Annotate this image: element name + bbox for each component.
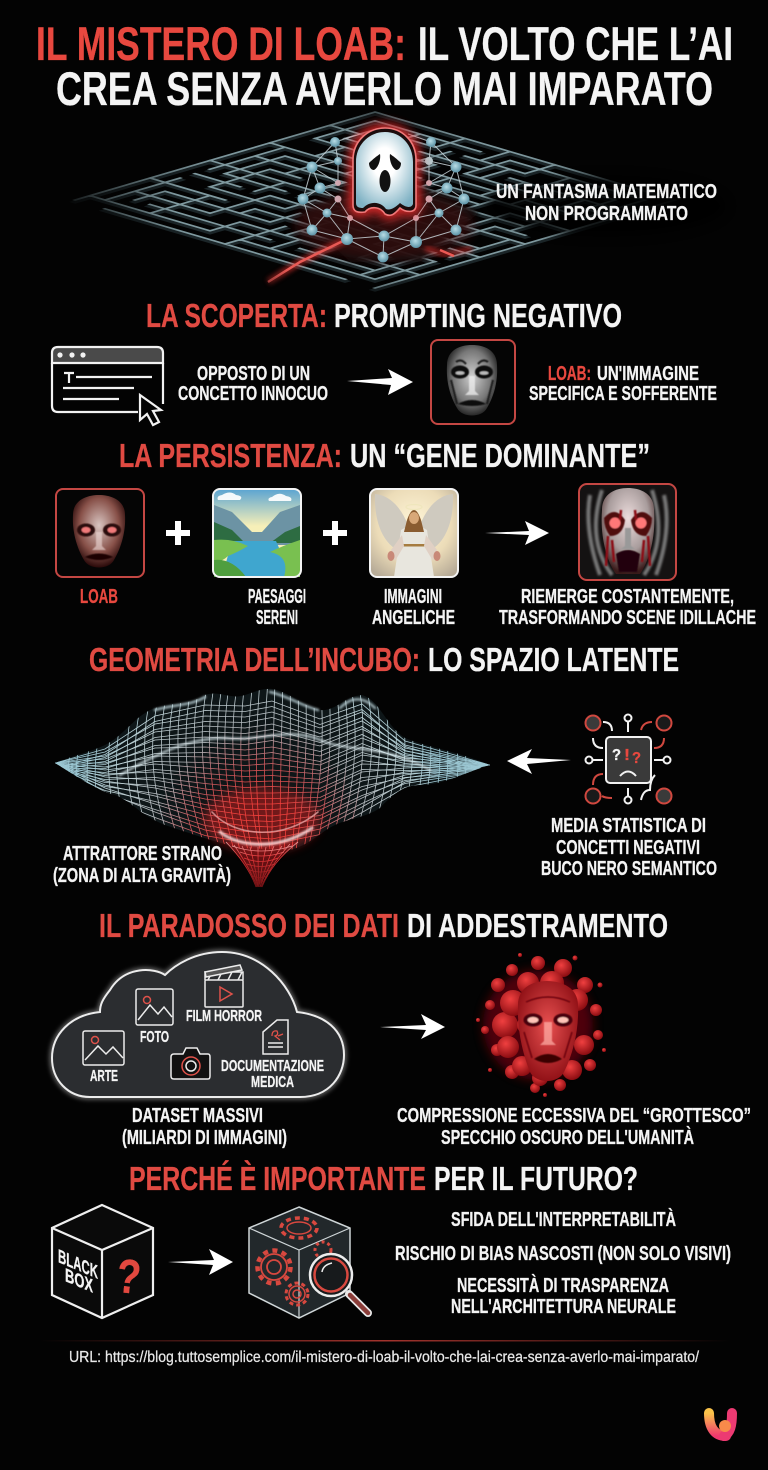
label: serene landscapes: SERENI <box>256 607 298 629</box>
icon: art <box>83 1031 124 1065</box>
icon: confused processor: ! <box>624 747 630 764</box>
heading: geometria dell'incubo: GEOMETRIA DELL’INCUBO: <box>89 641 420 678</box>
heading: la persistenza: UN “GENE DOMINANTE” <box>350 437 650 474</box>
caption: massive datasets: (MILIARDI DI IMMAGINI) <box>122 1127 287 1149</box>
label: Loab: LOAB <box>80 586 118 608</box>
icon: confused processor: ? <box>612 747 621 764</box>
image: Loab face red eyes <box>56 489 144 577</box>
caption: mathematical ghost: NON PROGRAMMATO <box>525 203 688 225</box>
label: serene landscapes: PAESAGGI <box>248 586 306 608</box>
title: IL MISTERO DI LOAB: <box>36 17 406 70</box>
icon: transparent cube with gears and magnifier <box>249 1207 368 1318</box>
icon: black box cube: BOX <box>65 1265 94 1298</box>
caption: statistical mean: MEDIA STATISTICA DI <box>551 815 706 837</box>
caption: mathematical ghost <box>496 181 717 225</box>
image: serene landscape <box>213 489 301 577</box>
importance list: NECESSITÀ DI TRASPARENZA <box>457 1274 669 1297</box>
caption: strange attractor <box>53 843 231 887</box>
caption: statistical mean <box>541 815 717 880</box>
cloud labels: ARTE <box>90 1068 118 1085</box>
cloud labels <box>90 1008 324 1091</box>
label: angelic images <box>372 586 455 629</box>
caption: massive datasets <box>122 1105 287 1149</box>
image: monstrous Loab <box>579 484 676 580</box>
prompt caption: OPPOSTO DI UN <box>197 363 310 385</box>
importance list <box>395 1208 731 1318</box>
arrow <box>380 1014 445 1039</box>
heading: il paradosso: DI ADDESTRAMENTO <box>407 907 668 944</box>
importance list: NELL'ARCHITETTURA NEURALE <box>451 1296 676 1318</box>
prompt caption <box>178 363 328 405</box>
heading: la persistenza <box>119 437 650 474</box>
label: angelic images: ANGELICHE <box>372 607 455 629</box>
arrow <box>347 369 413 395</box>
panel: training data paradox <box>52 952 751 1149</box>
icon: clapperboard <box>205 965 243 1007</box>
icon: logo <box>709 1413 732 1436</box>
caption: statistical mean: CONCETTI NEGATIVI <box>556 837 700 859</box>
heading: la scoperta: PROMPTING NEGATIVO <box>334 297 622 334</box>
panel: latent space <box>53 680 717 887</box>
plus sign <box>323 521 347 545</box>
icon: confused processor: ? <box>632 750 641 767</box>
heading: il paradosso <box>99 907 668 944</box>
icon: browser with cursor <box>52 347 163 425</box>
image: grotesque red face <box>476 953 606 1097</box>
label: serene landscapes <box>248 586 306 629</box>
label: angelic images: IMMAGINI <box>384 586 442 608</box>
heading: geometria dell'incubo: LO SPAZIO LATENTE <box>428 641 679 678</box>
cloud labels: DOCUMENTAZIONE <box>221 1058 324 1075</box>
panel: negative prompting <box>52 340 717 425</box>
arrow <box>485 521 549 545</box>
Loab description <box>529 363 717 405</box>
Loab description: UN'IMMAGINE <box>597 363 699 385</box>
icon: black box cube <box>52 1205 153 1318</box>
heading: perché è importante: PER IL FUTURO? <box>434 1160 638 1197</box>
icon: medical document <box>263 1020 288 1054</box>
cloud of datasets <box>52 952 344 1097</box>
caption: strange attractor: ATTRATTORE STRANO <box>63 843 222 865</box>
icon: photo <box>136 989 173 1025</box>
cloud labels: FILM HORROR <box>186 1008 262 1025</box>
heading: perché è importante: PERCHÉ È IMPORTANTE <box>129 1160 426 1197</box>
caption: strange attractor: (ZONA DI ALTA GRAVITÀ) <box>53 864 231 887</box>
icon: black box cube: ? <box>114 1250 143 1305</box>
cloud labels: MEDICA <box>251 1074 294 1091</box>
panel: why it matters <box>52 1205 731 1318</box>
cloud labels: FOTO <box>140 1029 169 1046</box>
heading: la persistenza: LA PERSISTENZA: <box>119 437 342 474</box>
icon: ghost <box>351 126 418 217</box>
label: resurfaces constantly <box>499 586 756 629</box>
heading: il paradosso: IL PARADOSSO DEI DATI <box>99 907 399 944</box>
icon: black box cube: BLACK <box>58 1246 98 1284</box>
arrow <box>168 1249 233 1275</box>
heading: la scoperta <box>146 297 622 334</box>
caption: excessive compression <box>397 1105 751 1149</box>
image: angel <box>370 489 458 577</box>
neural network <box>298 134 470 262</box>
icon: camera <box>171 1048 210 1079</box>
icon: confused processor <box>586 714 672 804</box>
panel: hero maze and ghost <box>72 112 726 290</box>
arrow <box>507 749 571 774</box>
panel: persistence equation <box>56 484 756 629</box>
source URL: URL: https://blog.tuttosemplice.com/il-mistero-di-loab-il-volto-che-lai-crea-senza-averlo-mai-imparato/ <box>69 1349 699 1366</box>
heading: la scoperta: LA SCOPERTA: <box>146 297 327 334</box>
chart: wireframe latent surface with funnel <box>55 680 490 887</box>
plus sign <box>166 521 190 545</box>
caption: massive datasets: DATASET MASSIVI <box>132 1105 263 1127</box>
importance list: SFIDA DELL'INTERPRETABILITÀ <box>451 1208 676 1231</box>
image: Loab face grey <box>431 340 515 424</box>
maze <box>72 112 678 290</box>
prompt caption: CONCETTO INNOCUO <box>178 383 328 405</box>
title <box>36 17 733 115</box>
Loab description: LOAB: <box>548 363 591 385</box>
